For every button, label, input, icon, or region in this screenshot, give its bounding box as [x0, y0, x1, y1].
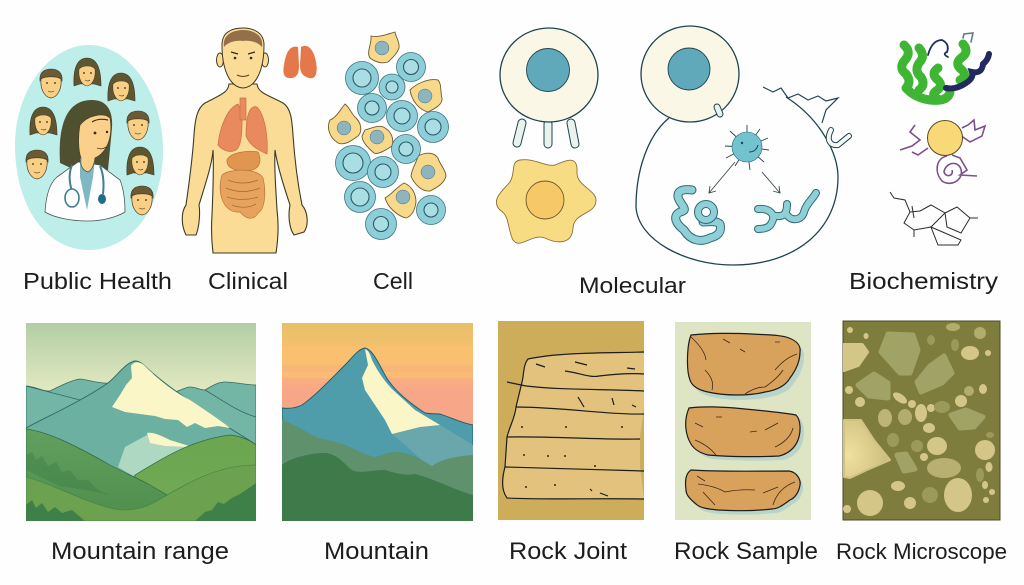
panel: molecular illustration [496, 26, 849, 265]
icon: spiky virus particle [725, 125, 769, 170]
label: Biochemistry: Biochemistry [849, 268, 999, 294]
middle rock [686, 407, 800, 457]
joint lines [503, 352, 644, 499]
background [843, 321, 1000, 520]
lower rock [686, 470, 800, 511]
panel: mountain range [26, 323, 256, 521]
middle green hill [282, 420, 473, 495]
pits on layers [521, 426, 623, 488]
dark front hill [282, 453, 473, 521]
icon: detached organ [283, 46, 317, 78]
sky [26, 323, 256, 391]
panel: clinical human body illustration [182, 28, 317, 253]
panel: public health illustration [15, 45, 163, 250]
coiled molecular strand [676, 190, 721, 240]
peak [282, 348, 473, 461]
icon: intestine [220, 170, 265, 218]
front hill [26, 465, 256, 521]
background [498, 321, 644, 520]
small pale grains [843, 323, 995, 516]
blue cell nuclei [343, 60, 441, 232]
icon: ring of community faces [26, 58, 154, 215]
label: Rock Microscope: Rock Microscope [836, 539, 1007, 564]
panel: cell cluster illustration [328, 32, 448, 240]
valley and lower snow patch [118, 435, 193, 476]
dim background grains [887, 335, 994, 503]
panel: mountain [282, 323, 473, 521]
background [675, 322, 811, 520]
large pale grains [844, 345, 867, 370]
yellow cell nuclei [337, 41, 435, 204]
right green hill [134, 434, 256, 494]
tree lines [26, 452, 256, 521]
molecular structure line drawing [890, 192, 978, 245]
ridge lines [26, 386, 256, 417]
label: Rock Joint: Rock Joint [509, 538, 627, 565]
yellow blob cell [496, 160, 596, 243]
yellow core with purple chains [900, 120, 985, 183]
body silhouette [182, 84, 307, 253]
teal oval background [15, 45, 163, 250]
icon: stomach [227, 151, 260, 171]
sunset sky [282, 323, 473, 433]
upper rock [687, 333, 800, 395]
main peak [26, 361, 256, 480]
membrane receptor [829, 130, 849, 145]
panel: rock microscope [843, 321, 1000, 520]
label: Clinical: Clinical [208, 268, 288, 294]
icon: doctor with stethoscope [45, 100, 125, 221]
icon: lungs [218, 98, 267, 154]
rock layers [502, 352, 644, 499]
snow face [362, 349, 440, 434]
top cell with nucleus [641, 26, 739, 122]
panel: rock joint [498, 321, 644, 520]
rock shadows [689, 338, 804, 515]
arrow: virus to coiled strand [709, 162, 735, 193]
lower snow [147, 433, 192, 447]
label: Public Health: Public Health [23, 268, 172, 294]
label: Mountain: Mountain [324, 538, 429, 565]
open molecular strand [758, 193, 816, 229]
panel: rock sample [675, 322, 811, 520]
protein ribbon: navy chain [928, 33, 989, 88]
label: Mountain range: Mountain range [51, 538, 229, 565]
arrow: virus to open strand [762, 172, 780, 193]
label: Molecular: Molecular [579, 273, 686, 298]
cell with receptors [500, 28, 598, 144]
label: Cell: Cell [373, 268, 413, 294]
sky bands [282, 372, 473, 378]
large enclosing cell outline [636, 97, 838, 265]
lighter slope below snow [392, 425, 473, 470]
protein ribbon: green helices [902, 44, 966, 100]
yellow cells [328, 32, 446, 218]
large gray-green grains [858, 334, 983, 471]
back ridges [26, 360, 256, 444]
blue cells [336, 52, 448, 240]
left green hill [26, 428, 167, 510]
panel: biochemistry illustration [890, 33, 989, 245]
label: Rock Sample: Rock Sample [674, 538, 818, 565]
head [216, 28, 268, 88]
snow cap [112, 362, 230, 428]
squiggle on cell membrane [763, 87, 838, 123]
